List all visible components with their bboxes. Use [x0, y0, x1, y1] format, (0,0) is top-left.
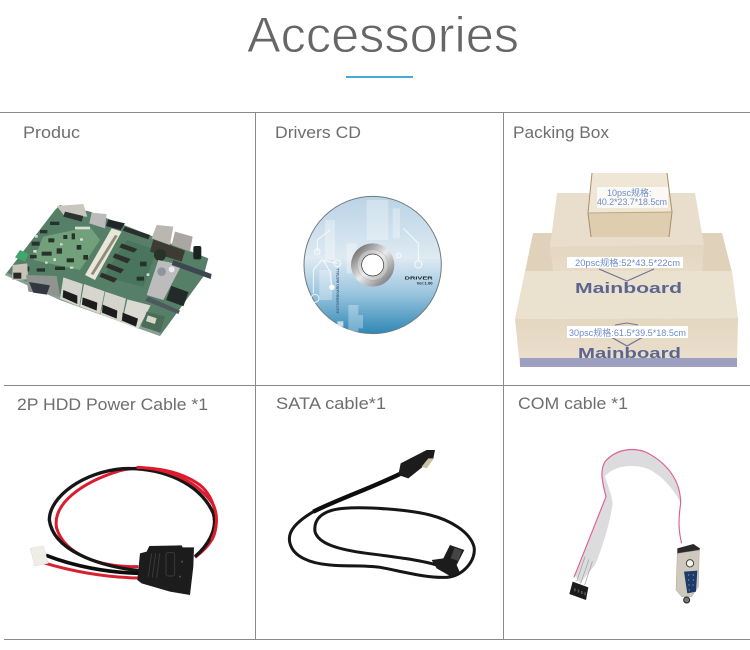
header socket	[569, 582, 588, 600]
box small	[588, 173, 672, 213]
box back flap large	[525, 233, 732, 272]
left wires	[43, 563, 138, 578]
small bottom connector	[142, 312, 165, 333]
icon: power cable	[30, 467, 216, 595]
label: SATA cable: SATA cable*1	[276, 394, 386, 413]
box print: Mainboard	[575, 281, 682, 297]
icon: stacked boxes: 20psc规格:52*43.5*22cm	[575, 257, 680, 268]
icon: stacked boxes: 30psc规格:61.5*39.5*18.5cm	[569, 327, 686, 338]
top edge connectors	[57, 204, 87, 217]
USB stack	[152, 225, 173, 245]
circuit decoration	[319, 200, 400, 332]
label: COM cable: COM cable *1	[518, 394, 628, 413]
chevrons	[599, 269, 654, 281]
scattered parts	[23, 222, 147, 281]
right-angle connector	[432, 545, 464, 576]
panel: HDD power cable	[17, 395, 216, 595]
icon: CD disc: Ver:1.00	[417, 280, 433, 285]
disc side text: MOTHERBOARD INSTALL	[336, 267, 340, 313]
icon: stacked boxes: Mainboard	[578, 346, 681, 362]
label: HDD power cable: 2P HDD Power Cable *1	[17, 395, 208, 414]
ribbon	[575, 450, 681, 583]
mSATA bracket	[147, 260, 182, 300]
memory chips	[99, 243, 137, 283]
pcb lighter areas	[33, 227, 100, 270]
green terminal	[15, 250, 28, 262]
SATA connector	[137, 545, 194, 595]
panel: SATA cable	[276, 394, 474, 577]
capacitors	[193, 246, 201, 259]
size labels	[597, 187, 668, 208]
icon: SATA cable	[289, 450, 474, 577]
straight connector	[398, 450, 435, 478]
icon: COM cable	[569, 450, 700, 603]
CD hub	[351, 243, 394, 287]
memory slot	[85, 228, 122, 280]
panel: packing box	[513, 123, 738, 367]
panel: drivers CD	[275, 123, 441, 334]
icon: stacked boxes: 10psc规格:	[607, 187, 652, 198]
icon: mainboard	[5, 204, 212, 336]
title accent line	[346, 76, 413, 78]
label: packing box: Packing Box	[513, 123, 610, 142]
panel: product	[5, 123, 212, 336]
icon: stacked boxes: 40.2*23.7*18.5cm	[597, 197, 667, 207]
box large	[515, 271, 738, 319]
title: Accessories	[247, 7, 519, 63]
icon: stacked boxes	[515, 173, 738, 367]
DB9	[26, 275, 60, 296]
RJ45 ports	[60, 277, 151, 329]
label: product: Produc	[23, 123, 81, 142]
DB9 connector	[677, 544, 700, 555]
label: drivers CD: Drivers CD	[275, 123, 361, 142]
box middle	[550, 193, 704, 247]
icon: CD disc	[304, 196, 441, 334]
icon: CD disc: DRIVER	[405, 275, 433, 281]
power jack	[12, 263, 28, 280]
panel: COM cable	[518, 394, 700, 603]
black loop	[49, 469, 215, 571]
JST plug	[30, 546, 48, 566]
red loop	[56, 468, 216, 567]
